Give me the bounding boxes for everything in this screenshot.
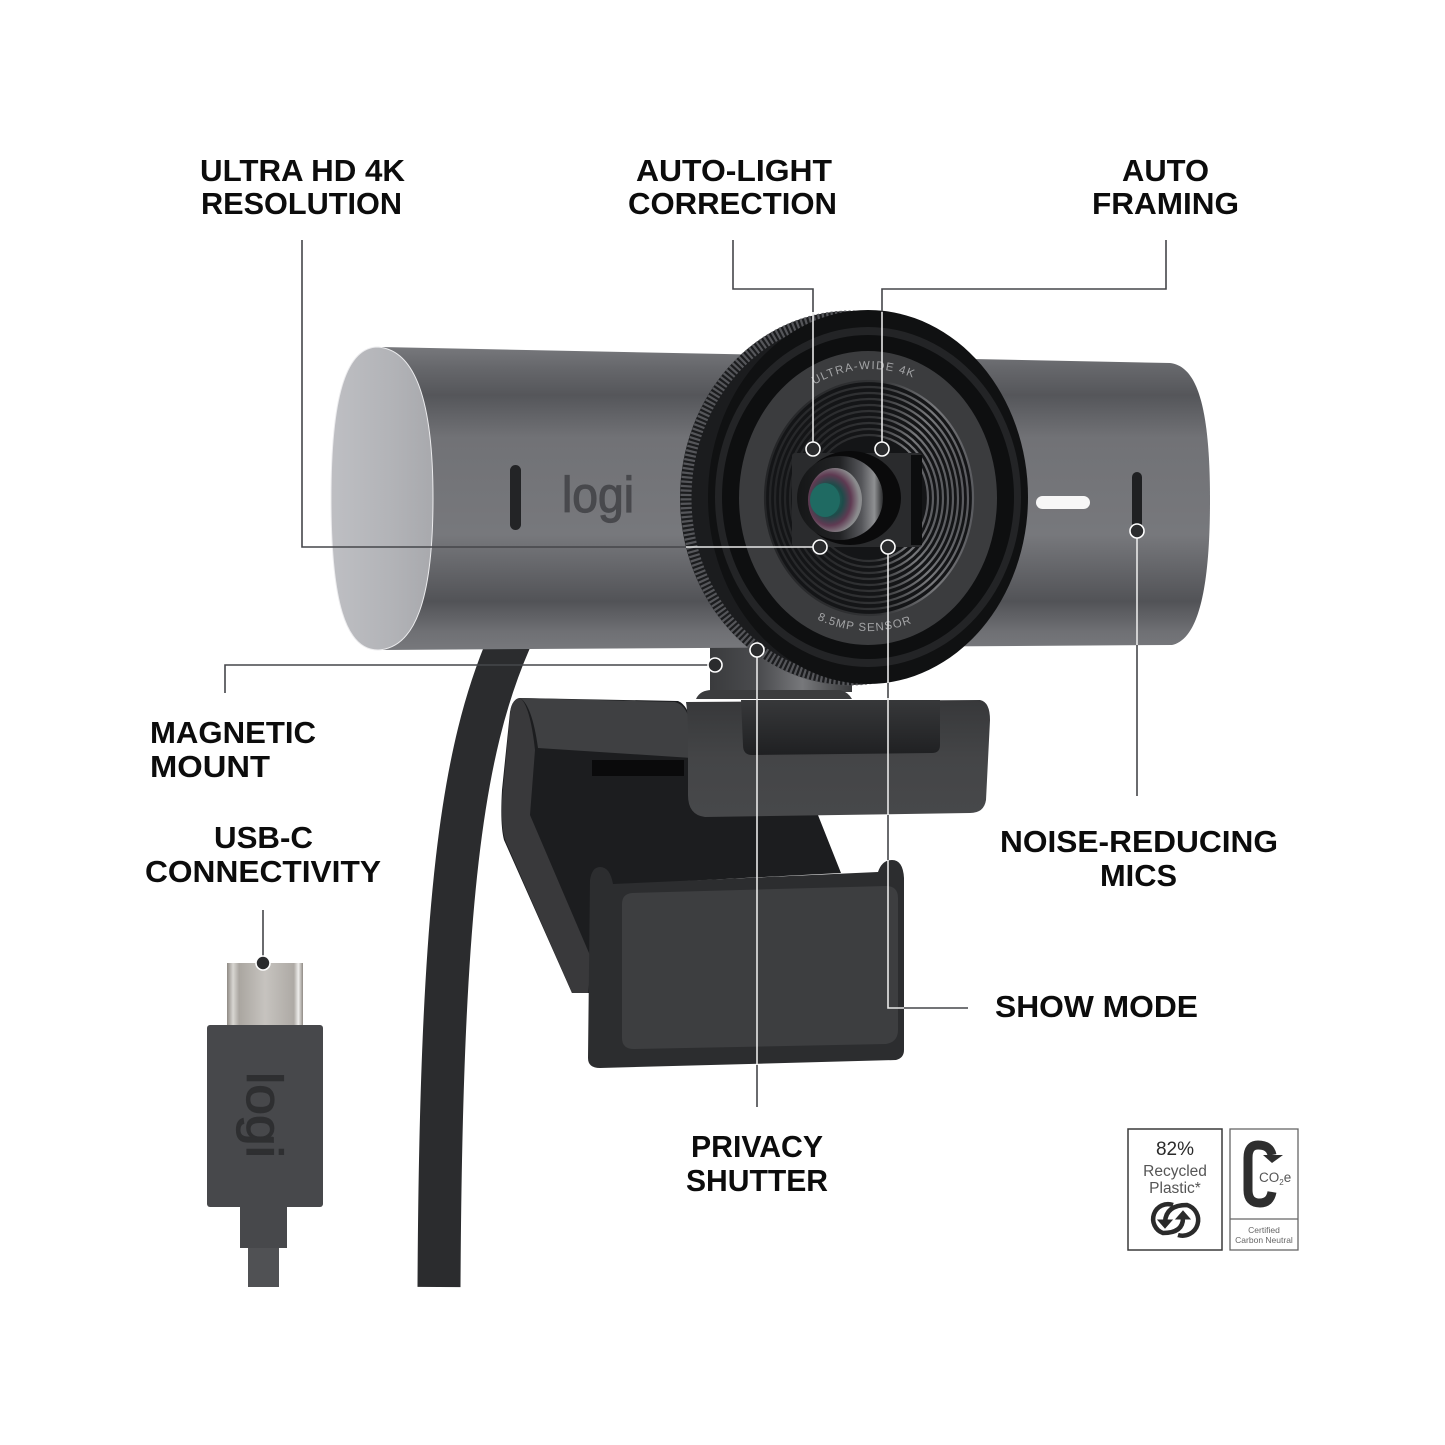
foot panel [622, 886, 898, 1049]
label: magnetic mount [150, 716, 316, 784]
label: noise-reducing mics [1000, 825, 1278, 893]
label: magnetic mount: MAGNETIC [150, 716, 316, 750]
badge: carbon neutral: e [1284, 1170, 1291, 1185]
left end cap [331, 347, 433, 650]
label: ultra hd 4k resolution: ULTRA HD 4K [200, 154, 405, 188]
badge: carbon neutral: 2 [1279, 1178, 1284, 1187]
sensor window [792, 453, 922, 547]
label: ultra hd 4k resolution: RESOLUTION [201, 187, 402, 221]
label: auto-light correction: AUTO-LIGHT [636, 154, 832, 188]
leader: auto-light [733, 240, 820, 456]
badge: recycled plastic: Recycled [1143, 1163, 1207, 1180]
label: usb-c connectivity: CONNECTIVITY [145, 855, 381, 889]
foot [588, 860, 904, 1068]
label: privacy shutter: SHUTTER [686, 1164, 828, 1198]
metal plug [227, 963, 303, 1026]
icon: recycle loop [1153, 1204, 1198, 1236]
badge: carbon neutral [1230, 1129, 1298, 1250]
label: auto framing: FRAMING [1092, 187, 1239, 221]
ring text top: ULTRA-WIDE 4K [812, 360, 915, 384]
label: auto framing: AUTO [1122, 154, 1209, 188]
badge: recycled plastic: Plastic* [1149, 1180, 1201, 1197]
lens assembly [680, 310, 1028, 686]
label: noise-reducing mics: MICS [1100, 859, 1177, 893]
clip upper front [686, 700, 990, 817]
label: usb-c connectivity: USB-C [214, 821, 313, 855]
clip back arm [501, 698, 841, 993]
leader: noise-reducing mics [1130, 524, 1144, 796]
label: show mode: SHOW MODE [995, 990, 1198, 1024]
clip opening [592, 760, 684, 776]
leader: usb-c [256, 910, 270, 970]
connector housing [207, 1025, 323, 1207]
label: auto-light correction: CORRECTION [628, 187, 837, 221]
badge: recycled plastic [1128, 1129, 1222, 1250]
logi logo: logi [562, 467, 634, 523]
ribbed bezel [765, 381, 973, 615]
knurled ring [680, 311, 1020, 685]
mount clip [501, 698, 990, 1068]
label: magnetic mount: MOUNT [150, 750, 270, 784]
lens barrel [797, 456, 883, 540]
camera body [331, 347, 1210, 650]
outer disc [708, 310, 1028, 684]
label: privacy shutter: PRIVACY [691, 1130, 823, 1164]
label: privacy shutter [686, 1130, 828, 1198]
label: usb-c connectivity [145, 821, 381, 889]
leader: auto framing [875, 240, 1166, 456]
label: noise-reducing mics: NOISE-REDUCING [1000, 825, 1278, 859]
leader: privacy shutter [750, 643, 764, 1107]
badge: carbon neutral: Certified [1248, 1225, 1280, 1235]
icon: carbon arrow c [1248, 1145, 1283, 1203]
clip side strip [502, 698, 592, 993]
label: ultra hd 4k resolution [200, 154, 405, 221]
leader: show mode [881, 540, 968, 1008]
body barrel [378, 347, 1210, 650]
status light [1036, 496, 1090, 509]
clip top left [520, 698, 692, 758]
USB-C connector [207, 963, 323, 1287]
stand neck [696, 640, 852, 699]
badge: carbon neutral: Carbon Neutral [1235, 1235, 1293, 1245]
badge: recycled plastic: 82% [1156, 1139, 1194, 1160]
left mic slit [510, 465, 521, 530]
strain relief and cable [248, 1245, 279, 1287]
leader: ultra hd [302, 240, 827, 554]
lens black ring [799, 451, 901, 545]
clip recess [741, 700, 940, 755]
ring text bottom: 8.5MP SENSOR [818, 613, 911, 632]
badge: carbon neutral: CO [1259, 1170, 1279, 1185]
cable [439, 640, 510, 1287]
label: auto framing [1092, 154, 1239, 221]
label: auto-light correction [628, 154, 837, 221]
lens glass [808, 468, 862, 532]
embossed logi: logi [236, 1072, 292, 1158]
right mic slit [1132, 472, 1142, 534]
grey ring [739, 351, 997, 645]
leader: magnetic mount [225, 658, 722, 693]
